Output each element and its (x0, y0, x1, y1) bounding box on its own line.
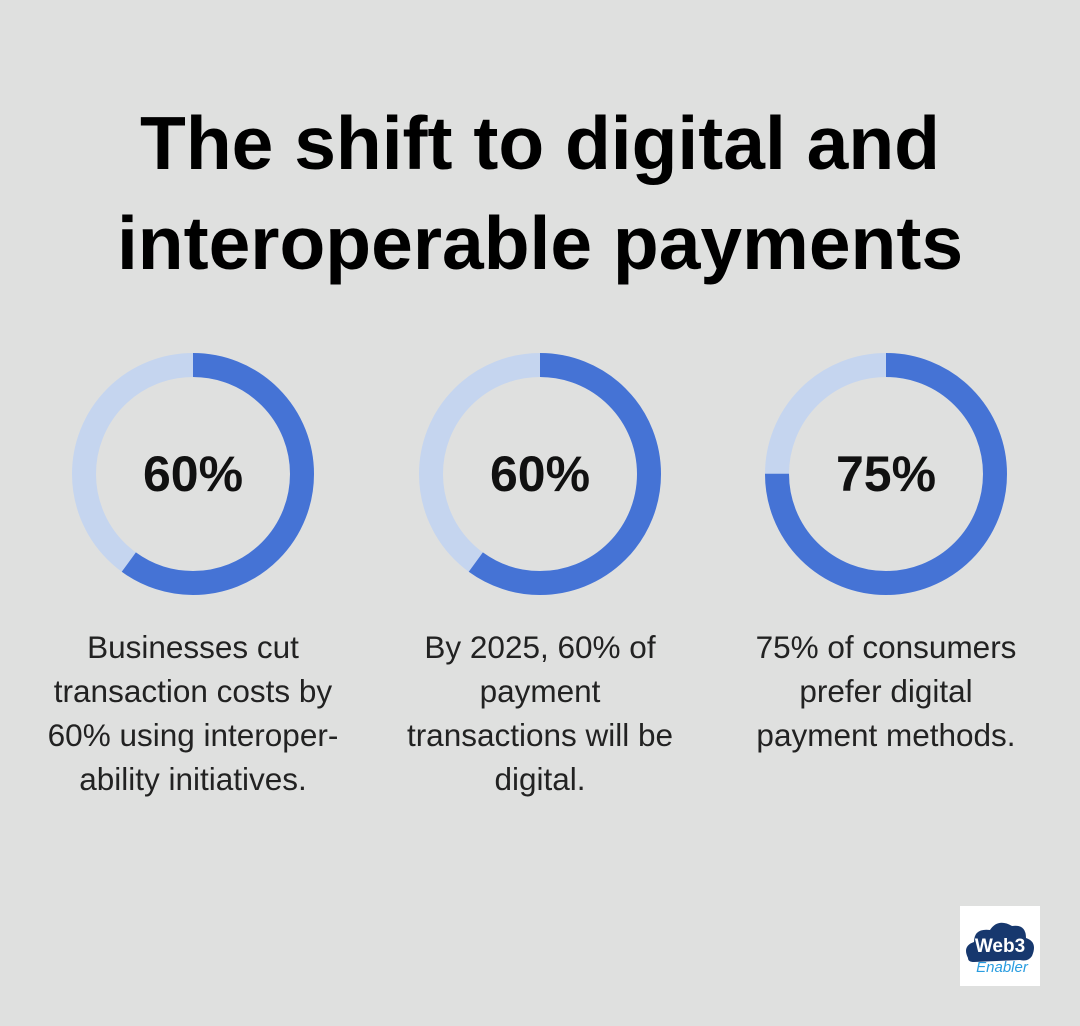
text: description 3: payment methods. (756, 717, 1016, 753)
text: description 2: transactions will be digital. (407, 717, 673, 797)
logo: Enabler (976, 959, 1029, 976)
text: description 2: By 2025, 60% of payment (424, 629, 656, 709)
logo (960, 906, 1040, 986)
logo: Web3 (975, 936, 1025, 957)
text: description 1: Businesses cut transaction costs by 60% using interoper-ability initiatives. (48, 629, 338, 797)
title: The shift to digital and (140, 101, 940, 185)
donut: 60% digital (419, 353, 661, 595)
donut: 75%: 75% (836, 446, 936, 502)
text: description 2 (407, 629, 673, 797)
title (117, 101, 963, 285)
donut: 75% (765, 353, 1007, 595)
text: description 3: 75% of consumers prefer digital (756, 629, 1016, 709)
donut: 60% costs: 60% (143, 446, 243, 502)
text: description 3 (756, 629, 1016, 753)
donut: 60% digital: 60% (490, 446, 590, 502)
title: interoperable payments (117, 201, 963, 285)
donut: 60% costs (72, 353, 314, 595)
